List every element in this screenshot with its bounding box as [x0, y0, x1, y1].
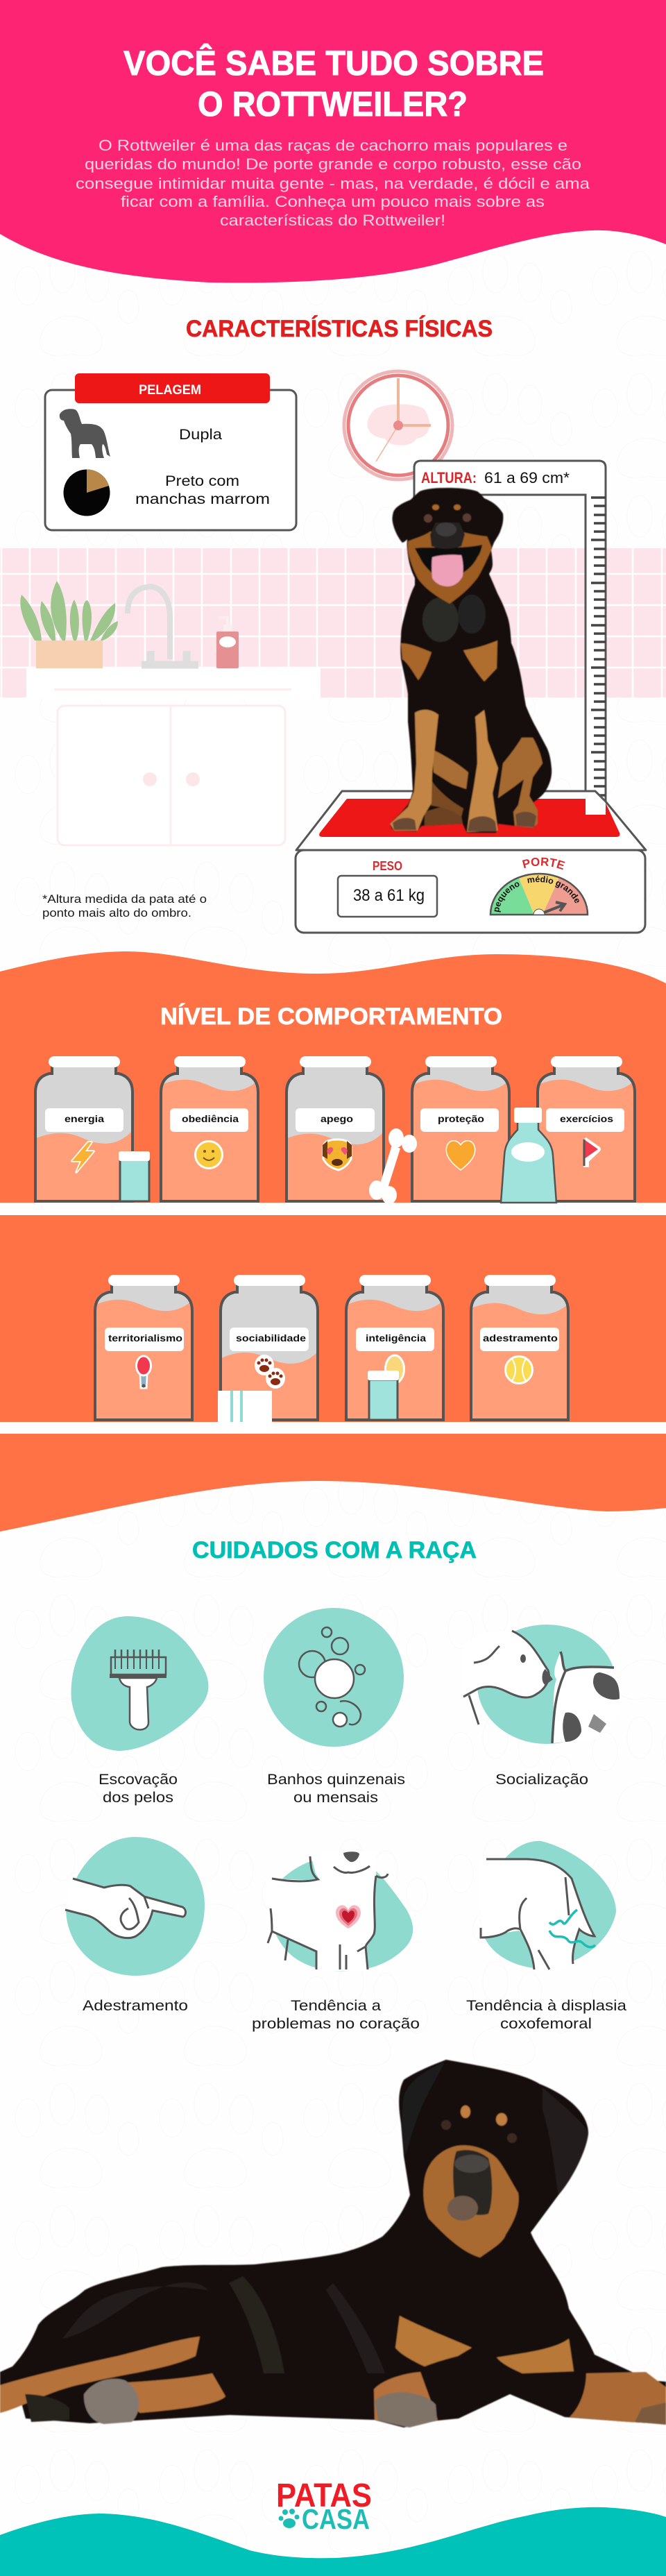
weight label: PESO — [373, 859, 402, 873]
intro text — [76, 137, 590, 229]
jar: sociabilidade: sociabilidade — [236, 1332, 306, 1344]
orange wave background — [0, 951, 666, 1532]
header panel — [0, 0, 666, 283]
care item: coração — [252, 1852, 420, 2032]
panel: pelagem — [45, 373, 296, 530]
intro text: ficar com a família. Conheça um pouco mais sobre as — [121, 193, 545, 210]
wall clock — [344, 371, 452, 480]
pelagem tab: PELAGEM — [139, 383, 201, 398]
icon: light bulb — [386, 1355, 404, 1383]
care item: banhos — [264, 1608, 405, 1806]
jar: exercícios — [538, 1056, 635, 1201]
coat colour text: manchas marrom — [135, 491, 270, 507]
photo: lying rottweiler — [0, 2060, 666, 2427]
height label: 61 a 69 cm* — [484, 469, 570, 486]
icon: heart — [447, 1141, 475, 1169]
logo: CASA — [302, 2503, 370, 2535]
jar: adestramento — [471, 1275, 568, 1420]
intro text: O Rottweiler é uma das raças de cachorro mais populares e — [99, 137, 567, 154]
prop: bone — [369, 1128, 417, 1204]
jar: inteligência: inteligência — [366, 1332, 426, 1344]
care item: displasia — [466, 1841, 626, 2032]
bottom teal wave — [0, 2507, 666, 2576]
jar: obediência — [161, 1056, 258, 1201]
title: VOCÊ SABE TUDO SOBRE — [123, 44, 544, 83]
jar: energia: energia — [65, 1113, 104, 1124]
soap bottle — [216, 618, 239, 668]
jar: territorialismo — [95, 1275, 192, 1420]
label — [267, 1772, 405, 1806]
icon: brush — [110, 1650, 166, 1729]
bathroom scene background — [0, 371, 666, 845]
blob — [71, 1616, 208, 1751]
icon: heart — [336, 1905, 361, 1929]
label: Escovação — [99, 1772, 178, 1788]
label: Adestramento — [83, 1998, 188, 2014]
size gauge: PORTE — [522, 858, 565, 870]
pelagem tab — [75, 373, 270, 403]
jar: proteção — [412, 1056, 509, 1201]
jar: inteligência — [346, 1275, 443, 1420]
jar: proteção: proteção — [438, 1113, 484, 1124]
photo: sitting rottweiler — [390, 488, 552, 833]
sink counter — [26, 668, 321, 699]
jar: apego — [287, 1056, 384, 1201]
icon: dog chest — [266, 1852, 388, 1971]
size gauge — [490, 858, 588, 916]
icon: coat colour pie — [64, 469, 110, 516]
jar: adestramento: adestramento — [483, 1332, 558, 1344]
footnote: ponto mais alto do ombro. — [42, 906, 191, 920]
label: coxofemoral — [500, 2016, 592, 2032]
icon: two dogs — [463, 1631, 620, 1743]
red mat — [319, 799, 620, 837]
intro text: queridas do mundo! De porte grande e corpo robusto, esse cão — [85, 155, 581, 173]
label: Banhos quinzenais — [267, 1772, 405, 1788]
shelf 1 — [0, 1203, 666, 1215]
icon: dog hind leg — [480, 1859, 595, 1971]
coat colour text — [135, 473, 270, 507]
cabinet — [58, 706, 285, 845]
icon: dog silhouette — [60, 409, 110, 458]
intro text: consegue intimidar muita gente - mas, na verdade, é dócil e ama — [76, 175, 590, 192]
prop: teal cup 2 — [368, 1371, 399, 1420]
jar: sociabilidade — [221, 1275, 318, 1420]
blob — [264, 1608, 404, 1747]
icon: pointing hand — [65, 1879, 186, 1938]
icon: flag — [584, 1139, 598, 1167]
jar: energia — [35, 1056, 133, 1201]
size gauge: grande — [555, 881, 579, 904]
intro text: características do Rottweiler! — [220, 212, 445, 229]
footnote — [42, 892, 207, 920]
label: Tendência à displasia — [466, 1998, 626, 2014]
logo — [276, 2477, 372, 2535]
jar: apego: apego — [321, 1113, 353, 1124]
label — [466, 1998, 626, 2032]
label: ou mensais — [293, 1790, 378, 1806]
height label: ALTURA: — [421, 469, 477, 486]
icon: smiley — [196, 1141, 222, 1169]
title: O ROTTWEILER? — [198, 85, 468, 124]
icon: bubbles — [299, 1627, 365, 1727]
label: dos pelos — [103, 1790, 173, 1806]
label: problemas no coração — [252, 2016, 420, 2032]
blob — [481, 1841, 616, 1969]
coat type text: Dupla — [179, 427, 222, 443]
jar: territorialismo: territorialismo — [108, 1332, 182, 1344]
coat colour text: Preto com — [165, 473, 239, 489]
height ruler — [414, 461, 606, 815]
heading: NÍVEL DE COMPORTAMENTO — [160, 1003, 502, 1030]
prop: striped box — [218, 1391, 272, 1422]
label — [252, 1998, 420, 2032]
size gauge: médio — [527, 876, 554, 884]
label: Socialização — [495, 1772, 588, 1788]
care item: escovação — [71, 1616, 208, 1806]
ruler ticks — [591, 498, 606, 795]
header pink wave background — [0, 0, 666, 283]
icon: paw prints — [255, 1355, 285, 1389]
label — [99, 1772, 178, 1806]
scale platform — [294, 790, 647, 934]
icon: thermometer — [136, 1356, 151, 1388]
jar: obediência: obediência — [182, 1113, 239, 1124]
icon: tennis ball — [505, 1356, 533, 1384]
shelf 2 — [0, 1422, 666, 1434]
prop: teal cup — [119, 1151, 150, 1201]
heading: cuidados com a raça: CUIDADOS COM A RAÇA — [192, 1537, 477, 1564]
faucet — [128, 586, 198, 665]
blob — [66, 1837, 205, 1976]
care item: adestramento — [65, 1837, 205, 2014]
title — [123, 44, 544, 124]
weight box — [338, 876, 437, 917]
jar: exercícios: exercícios — [560, 1113, 613, 1124]
icon: dog emoji — [323, 1139, 352, 1170]
size gauge: pequeno — [494, 882, 519, 913]
label: Tendência a — [291, 1998, 381, 2014]
heading: características físicas: CARACTERÍSTICAS FÍSICAS — [186, 316, 493, 342]
footnote: *Altura medida da pata até o — [42, 892, 207, 906]
blob — [477, 1625, 616, 1744]
height label — [421, 469, 570, 486]
prop: teal bottle — [501, 1108, 556, 1203]
panel: nível de comportamento — [0, 951, 666, 1532]
care item: socialização — [463, 1625, 620, 1788]
icon: lightning bolt — [72, 1142, 94, 1172]
weight box: 38 a 61 kg — [353, 886, 425, 905]
icon: logo paw — [279, 2509, 300, 2528]
blob — [269, 1855, 413, 1971]
plant — [20, 581, 118, 668]
logo: PATAS — [276, 2477, 372, 2514]
wall tiles — [0, 548, 666, 697]
